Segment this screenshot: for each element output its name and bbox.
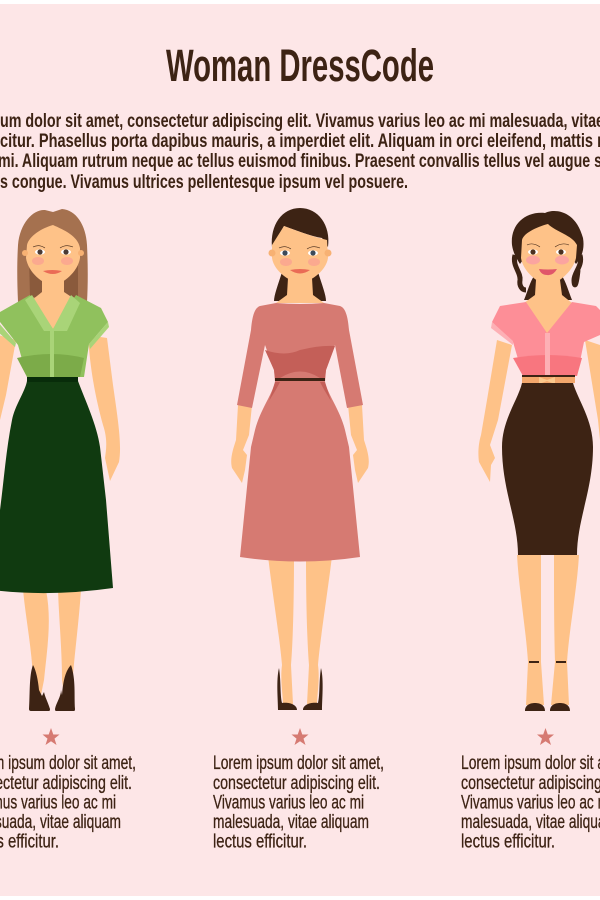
arms bbox=[478, 340, 600, 482]
collar bbox=[25, 295, 80, 331]
legs bbox=[268, 556, 332, 704]
dress bbox=[237, 303, 363, 562]
legs bbox=[517, 555, 579, 705]
figure: woman in green blouse and dark green skirt bbox=[0, 209, 120, 711]
caption: center: Lorem ipsum dolor sit amet, bbox=[213, 753, 384, 774]
legs bbox=[23, 590, 81, 695]
back hair bbox=[524, 276, 572, 300]
belt bbox=[275, 378, 325, 381]
ponytails bbox=[274, 272, 326, 301]
caption: center: malesuada, vitae aliquam bbox=[213, 812, 369, 833]
caption: left bbox=[0, 753, 136, 852]
star: right bbox=[537, 728, 554, 745]
arms bbox=[231, 405, 369, 483]
waistband bbox=[27, 377, 78, 382]
curls bbox=[514, 255, 581, 290]
caption: center: Vivamus varius leo ac mi bbox=[213, 792, 364, 814]
figure: woman in pink-rose dress bbox=[231, 208, 369, 710]
blouse bbox=[0, 295, 108, 377]
caption: center: consectetur adipiscing elit. bbox=[213, 773, 380, 794]
hair bbox=[512, 211, 584, 264]
caption: right: lectus efficitur. bbox=[461, 832, 555, 852]
figure: woman in pink blouse and brown pencil skirt bbox=[478, 211, 600, 711]
ankle straps bbox=[529, 661, 566, 663]
shoes bbox=[29, 665, 75, 711]
neck bbox=[32, 280, 76, 335]
face bbox=[272, 226, 328, 283]
hair bbox=[17, 209, 88, 302]
shoes bbox=[525, 703, 570, 711]
pencil skirt bbox=[502, 383, 593, 555]
skirt bbox=[0, 381, 113, 593]
face bbox=[521, 224, 577, 285]
star: left bbox=[42, 728, 60, 745]
caption: right bbox=[461, 753, 600, 852]
neck bbox=[524, 280, 572, 340]
intro paragraph: s congue. Vivamus ultrices pellentesque ipsum vel posuere. bbox=[0, 172, 408, 193]
arms bbox=[0, 335, 120, 481]
caption: center bbox=[213, 753, 384, 852]
shoes bbox=[277, 668, 323, 710]
neck bbox=[276, 278, 324, 303]
intro paragraph bbox=[0, 111, 600, 193]
blouse bbox=[492, 302, 600, 376]
face bbox=[26, 225, 80, 285]
title: Woman DressCode bbox=[166, 40, 434, 91]
bow bbox=[539, 377, 555, 384]
belt bbox=[522, 376, 575, 383]
caption: center: lectus efficitur. bbox=[213, 832, 307, 852]
hair bbox=[272, 208, 328, 247]
star: center bbox=[292, 728, 308, 745]
